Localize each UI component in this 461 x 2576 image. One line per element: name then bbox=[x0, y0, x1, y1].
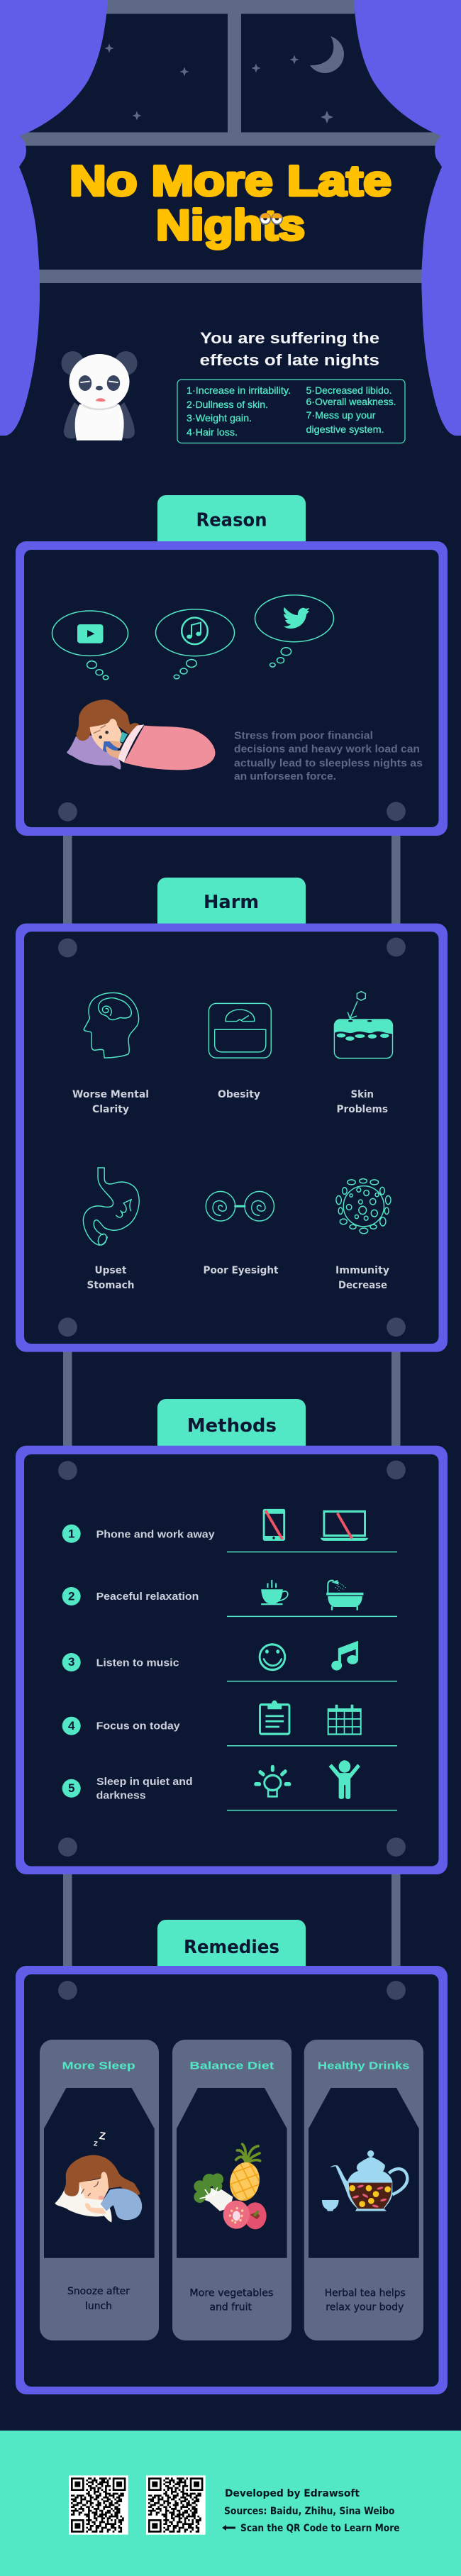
credits: Developed by Edrawsoft bbox=[225, 2488, 360, 2499]
card: Balance Diet bbox=[172, 2040, 291, 2340]
icon: virus bbox=[336, 1179, 391, 1234]
icon: sleepy eyes bbox=[260, 213, 282, 224]
card: Balance Diet: Balance Diet bbox=[189, 2060, 274, 2072]
number badges bbox=[62, 1525, 81, 1798]
label: Worse Mental Clarity: Clarity bbox=[92, 1104, 129, 1115]
method labels: Phone and work away bbox=[96, 1528, 215, 1540]
label: Immunity Decrease bbox=[335, 1265, 389, 1291]
header window scene bbox=[0, 0, 461, 436]
panel frame bbox=[16, 924, 448, 1352]
section: Reason bbox=[16, 495, 448, 836]
heading tab: Harm: Harm bbox=[204, 892, 259, 913]
panda illustration bbox=[61, 351, 138, 441]
illustration: girl on phone in bed bbox=[67, 700, 215, 770]
reason text: decisions and heavy work load can bbox=[234, 743, 420, 755]
panel frame bbox=[16, 1966, 448, 2394]
symptoms list box: 3·Weight gain. bbox=[187, 412, 252, 424]
section: Harm bbox=[16, 878, 448, 1352]
section: Remedies bbox=[16, 1920, 448, 2394]
credits: Scan the QR Code to Learn More bbox=[240, 2523, 400, 2534]
icon: laptop crossed out bbox=[321, 1512, 368, 1541]
thought bubble: video bbox=[52, 611, 128, 680]
reason text bbox=[234, 731, 423, 783]
icon: weighing scale bbox=[209, 1003, 271, 1058]
footer bbox=[0, 2431, 461, 2576]
icon: stars bbox=[105, 44, 333, 123]
reason text: Stress from poor financial bbox=[234, 731, 373, 742]
symptoms list box: 2·Dullness of skin. bbox=[187, 399, 268, 410]
symptoms list box: digestive system. bbox=[306, 424, 384, 435]
method labels: Peaceful relaxation bbox=[96, 1591, 199, 1603]
label: Obesity: Obesity bbox=[218, 1089, 260, 1100]
method labels: Listen to music bbox=[96, 1657, 179, 1669]
card: Balance Diet: and fruit bbox=[210, 2302, 252, 2314]
heading tab: Methods: Methods bbox=[187, 1415, 277, 1437]
illustration: vegetables and fruit bbox=[194, 2144, 267, 2229]
method labels: Sleep in quiet and bbox=[96, 1776, 193, 1788]
method labels: darkness bbox=[96, 1789, 146, 1802]
window frame bbox=[20, 0, 441, 283]
label: Upset Stomach bbox=[87, 1265, 135, 1291]
icon: music note bbox=[331, 1641, 358, 1671]
icon: clipboard bbox=[260, 1701, 289, 1734]
thought bubble: bird bbox=[255, 595, 333, 667]
label: Immunity Decrease: Immunity bbox=[335, 1265, 389, 1276]
number badges: 3 bbox=[68, 1655, 74, 1669]
heading tab: Reason bbox=[157, 495, 306, 541]
icon: person arms raised bbox=[329, 1760, 360, 1799]
arrow bbox=[222, 2525, 235, 2531]
card: More Sleep: Snooze after bbox=[67, 2286, 130, 2297]
card: Healthy Drinks: Healthy Drinks bbox=[318, 2060, 410, 2072]
illustration: teapot bbox=[322, 2150, 407, 2211]
card: Balance Diet: More vegetables bbox=[189, 2288, 273, 2299]
method labels bbox=[96, 1528, 215, 1802]
credits: Sources: Baidu, Zhihu, Sina Weibo bbox=[224, 2506, 395, 2517]
icon: bath tub bbox=[326, 1580, 363, 1610]
illustration: sleeping girl: Z bbox=[93, 2140, 99, 2147]
title bbox=[70, 157, 391, 249]
icon: hot cup bbox=[261, 1580, 288, 1605]
icon: smiley bbox=[260, 1644, 285, 1670]
reason text: actually lead to sleepless nights as bbox=[234, 758, 423, 769]
icon: spiral glasses bbox=[206, 1191, 274, 1221]
right curtain bbox=[354, 0, 461, 436]
heading tab: Remedies bbox=[157, 1920, 306, 1966]
row dividers bbox=[227, 1552, 397, 1811]
symptoms list box: 6·Overall weakness. bbox=[306, 396, 396, 407]
subtitle: effects of late nights bbox=[200, 351, 379, 369]
icon: moon bbox=[310, 36, 344, 73]
label: Poor Eyesight: Poor Eyesight bbox=[203, 1265, 279, 1276]
symptoms list box bbox=[177, 380, 405, 443]
label: Immunity Decrease: Decrease bbox=[338, 1280, 387, 1291]
number badges: 2 bbox=[68, 1589, 74, 1603]
thought bubble: music bbox=[156, 609, 234, 679]
card: More Sleep: lunch bbox=[85, 2301, 112, 2312]
label: Upset Stomach: Upset bbox=[95, 1265, 127, 1276]
left curtain bbox=[0, 0, 108, 436]
icon: head with brain bbox=[84, 993, 139, 1058]
number badges: 4 bbox=[68, 1719, 75, 1732]
icon: tablet crossed out bbox=[263, 1509, 285, 1541]
symptoms list box: 1·Increase in irritability. bbox=[187, 385, 291, 396]
label: Worse Mental Clarity bbox=[72, 1089, 149, 1115]
label: Worse Mental Clarity: Worse Mental bbox=[72, 1089, 149, 1100]
icon: calendar bbox=[328, 1705, 361, 1735]
symptoms list box: 4·Hair loss. bbox=[187, 426, 238, 438]
title: Nights bbox=[156, 201, 305, 249]
reason text: an unforseen force. bbox=[234, 771, 336, 783]
card: More Sleep bbox=[40, 2040, 159, 2340]
heading tab: Harm bbox=[157, 878, 306, 924]
label: Skin Problems: Skin bbox=[350, 1089, 374, 1100]
section: Methods bbox=[16, 1399, 448, 1874]
method labels: Focus on today bbox=[96, 1720, 180, 1732]
credits bbox=[222, 2488, 400, 2534]
symptoms list box: 5·Decreased libido. bbox=[306, 385, 391, 396]
label: Skin Problems: Problems bbox=[336, 1104, 388, 1115]
connecting poles bbox=[63, 836, 400, 1967]
panel frame bbox=[16, 541, 448, 836]
heading tab: Reason: Reason bbox=[196, 509, 267, 531]
panel frame bbox=[16, 1446, 448, 1874]
icon: light bulb bbox=[256, 1767, 289, 1796]
card: Healthy Drinks bbox=[304, 2040, 423, 2340]
subtitle: You are suffering the bbox=[200, 329, 379, 347]
icon: skin layers bbox=[334, 991, 392, 1058]
card: More Sleep: More Sleep bbox=[62, 2060, 135, 2072]
QR code 2 bbox=[146, 2475, 206, 2535]
card: Healthy Drinks: Herbal tea helps bbox=[325, 2288, 406, 2299]
icon: stomach bbox=[83, 1168, 139, 1246]
number badges: 5 bbox=[68, 1781, 74, 1795]
QR code 1 bbox=[69, 2475, 128, 2535]
illustration: sleeping girl: Z bbox=[99, 2130, 106, 2143]
label: Skin Problems bbox=[336, 1089, 388, 1115]
number badges: 1 bbox=[68, 1527, 74, 1541]
card: Healthy Drinks: relax your body bbox=[326, 2302, 404, 2314]
heading tab: Methods bbox=[157, 1399, 306, 1446]
symptoms list box: 7·Mess up your bbox=[306, 409, 376, 421]
title: No More Late bbox=[70, 157, 391, 204]
subtitle bbox=[200, 329, 379, 369]
label: Upset Stomach: Stomach bbox=[87, 1280, 135, 1291]
heading tab: Remedies: Remedies bbox=[184, 1937, 279, 1958]
illustration: sleeping girl bbox=[55, 2130, 142, 2222]
